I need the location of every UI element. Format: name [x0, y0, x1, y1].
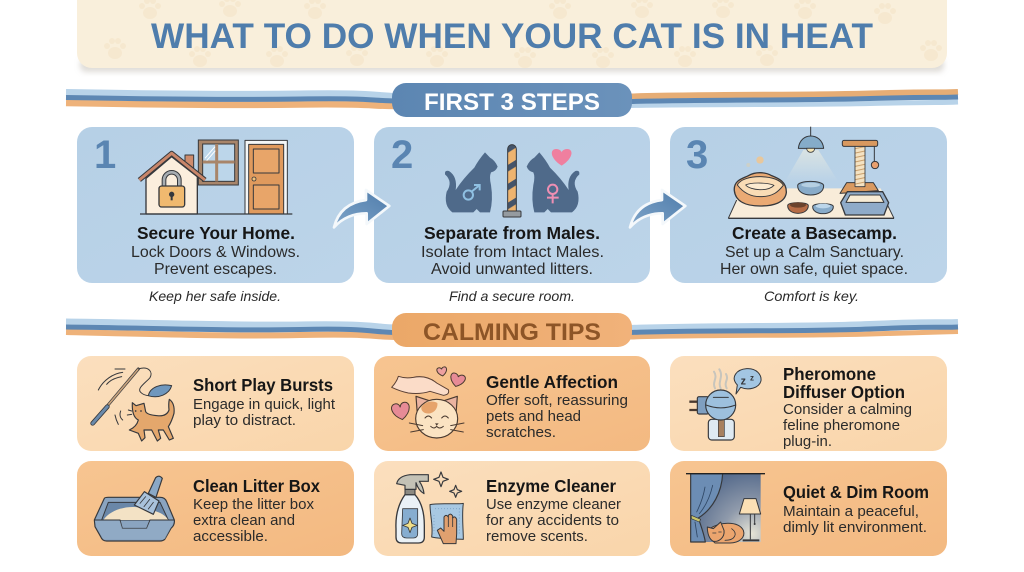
icon: female cat with heart	[527, 149, 579, 212]
icon: litter box with scoop	[94, 476, 174, 541]
tip description: for any accidents to	[486, 512, 619, 529]
tip description: remove scents.	[486, 528, 588, 545]
section header: first 3 steps	[66, 83, 958, 117]
step 2 heading: Separate from Males.	[424, 223, 600, 243]
step number 3: 3	[686, 133, 708, 177]
tip heading: Clean Litter Box	[193, 476, 320, 496]
step 1 description: Prevent escapes.	[154, 261, 277, 278]
step 1 caption: Keep her safe inside.	[149, 289, 281, 304]
tip description	[486, 496, 621, 545]
icon: plug-in diffuser with sleep bubble: z	[741, 376, 746, 388]
tip heading: Short Play Bursts	[193, 375, 333, 395]
tip description: scratches.	[486, 424, 556, 441]
tip description: pets and head	[486, 408, 581, 425]
arrow: step 2 to step 3	[630, 190, 685, 227]
tip heading: Diffuser Option	[783, 382, 905, 402]
icon: barrier post	[503, 145, 521, 217]
tip description: Keep the litter box	[193, 496, 314, 513]
tip description: Maintain a peaceful,	[783, 503, 919, 520]
step 3 description	[720, 244, 908, 278]
tip description: dimly lit environment.	[783, 519, 927, 536]
tip panel: quiet and dim room	[670, 461, 947, 556]
icon: male cat	[445, 152, 498, 212]
heading text: FIRST 3 STEPS	[424, 89, 600, 116]
step 3 description: Her own safe, quiet space.	[720, 261, 908, 278]
step 2 caption: Find a secure room.	[449, 289, 575, 304]
tip panel: gentle affection	[374, 356, 650, 451]
tip heading: Quiet & Dim Room	[783, 482, 929, 502]
section header: calming tips	[66, 313, 958, 347]
step 1 description	[131, 244, 300, 278]
tip heading: Pheromone	[783, 364, 876, 384]
tip description	[783, 503, 927, 536]
tip panel: pheromone diffuser	[670, 356, 947, 451]
tip heading: Enzyme Cleaner	[486, 476, 616, 496]
icon: dim room with curtain, lamp and sleeping cat	[686, 474, 765, 543]
step number 2: 2	[391, 133, 413, 177]
arrow: step 1 to step 2	[334, 190, 389, 227]
icon: wand and cat	[93, 368, 174, 441]
tip description	[783, 401, 912, 450]
tip panel: clean litter box	[77, 461, 354, 556]
step 1 heading: Secure Your Home.	[137, 223, 295, 243]
tip description: Engage in quick, light	[193, 396, 336, 413]
tip description	[486, 392, 628, 441]
tip heading	[783, 364, 905, 402]
icon: plug-in diffuser with sleep bubble: z	[750, 374, 754, 383]
icon: spray bottle, cloth and sparkles	[396, 472, 463, 544]
icon: hand petting cat with hearts	[391, 367, 466, 438]
tip description: Consider a calming	[783, 401, 912, 418]
title banner	[77, 0, 947, 72]
icon: plug-in diffuser with sleep bubble	[689, 369, 761, 440]
step 2 description: Avoid unwanted litters.	[431, 261, 593, 278]
tip description: feline pheromone	[783, 417, 900, 434]
tip description	[193, 496, 314, 545]
step 3 heading: Create a Basecamp.	[732, 223, 897, 243]
tip description: play to distract.	[193, 412, 296, 429]
tip heading: Gentle Affection	[486, 372, 618, 392]
step 1 panel	[77, 127, 354, 283]
step 3 description: Set up a Calm Sanctuary.	[725, 244, 904, 261]
icon: basecamp with bed, bowls, lamp, scratching post and litter box	[728, 127, 894, 218]
step 3 panel	[670, 127, 947, 283]
step 2 description	[421, 244, 604, 278]
step 1 description: Lock Doors & Windows.	[131, 244, 300, 261]
step 2 panel	[374, 127, 650, 283]
icon: house, window and door	[139, 140, 292, 214]
step 2 description: Isolate from Intact Males.	[421, 244, 604, 261]
step 3 caption: Comfort is key.	[764, 289, 859, 304]
tip description: Offer soft, reassuring	[486, 392, 628, 409]
tip description: extra clean and	[193, 512, 295, 529]
tip description: Use enzyme cleaner	[486, 496, 621, 513]
tip description	[193, 396, 336, 429]
tip description: accessible.	[193, 528, 268, 545]
title text: WHAT TO DO WHEN YOUR CAT IS IN HEAT	[151, 17, 873, 56]
tip panel: enzyme cleaner	[374, 461, 650, 556]
step number 1: 1	[94, 133, 116, 177]
tip panel: short play bursts	[77, 356, 354, 451]
heading text: CALMING TIPS	[423, 319, 601, 346]
tip description: plug-in.	[783, 433, 832, 450]
